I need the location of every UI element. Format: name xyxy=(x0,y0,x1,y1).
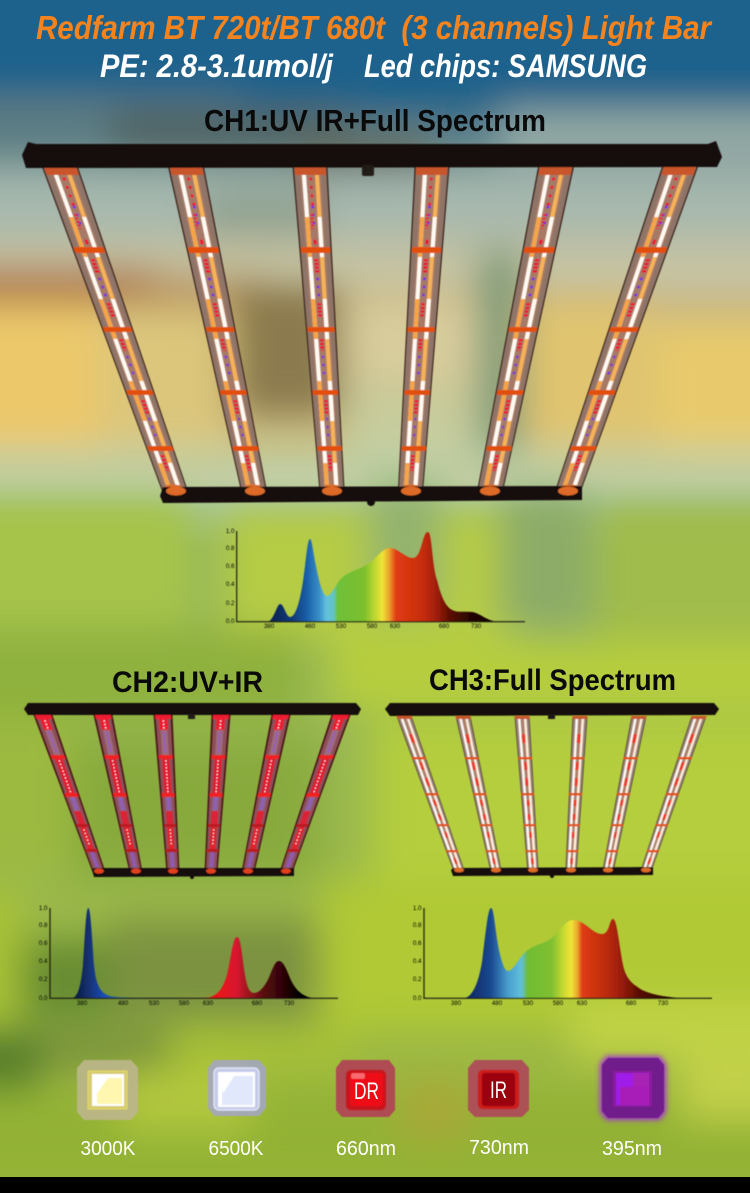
spectrum chart: CH2: 480 xyxy=(118,1000,129,1007)
spectrum chart: CH1: 0.6 xyxy=(226,563,235,570)
heading: CH3: CH3:Full Spectrum xyxy=(429,664,676,697)
CH1 bottom rail xyxy=(160,486,582,506)
icon: 3000K LED chip xyxy=(77,1060,138,1120)
spectrum chart: CH3: 630 xyxy=(577,1000,588,1007)
spectrum chart: CH3: 480 xyxy=(492,1000,503,1007)
CH2 bottom rail xyxy=(92,868,294,879)
icon: 6500K LED chip xyxy=(208,1060,266,1116)
spectrum chart: CH1: 1.0 xyxy=(226,528,235,535)
subtitle: PE and LED chips: Led chips: SAMSUNG xyxy=(364,48,647,84)
label: 730nm: 730nm xyxy=(469,1137,529,1159)
spectrum chart: CH3: 580 xyxy=(553,1000,564,1007)
subtitle: PE and LED chips xyxy=(100,48,647,84)
heading: CH1: CH1:UV IR+Full Spectrum xyxy=(204,103,546,138)
spectrum chart: CH2: 0.6 xyxy=(39,940,48,947)
icon: 730nm IR LED chip xyxy=(468,1060,529,1117)
label: 3000K: 3000K xyxy=(80,1138,136,1160)
spectrum chart: CH1 xyxy=(226,528,525,630)
spectrum chart: CH2: 580 xyxy=(179,1000,190,1007)
spectrum chart: CH1: 0.2 xyxy=(226,600,235,607)
spectrum chart: CH2: 530 xyxy=(149,1000,160,1007)
icon: 395nm UV LED chip xyxy=(600,1056,666,1120)
spectrum chart: CH3: 0.0 xyxy=(413,995,422,1002)
light bar: CH2 xyxy=(24,703,361,879)
spectrum chart: CH2: 0.2 xyxy=(39,976,48,983)
CH1 LED strips xyxy=(42,167,698,496)
spectrum chart: CH2: 380 xyxy=(77,1000,88,1007)
subtitle: PE and LED chips: PE: 2.8-3.1umol/j xyxy=(100,48,334,84)
light bar: CH1 xyxy=(22,141,722,506)
icon: 730nm IR LED chip: IR xyxy=(490,1077,507,1104)
label: 6500K: 6500K xyxy=(208,1138,264,1160)
spectrum chart: CH1: 630 xyxy=(390,623,401,630)
spectrum chart: CH2: 0.8 xyxy=(39,922,48,929)
spectrum chart: CH2: 630 xyxy=(203,1000,214,1007)
spectrum chart: CH3: 0.2 xyxy=(413,976,422,983)
spectrum chart: CH1: 380 xyxy=(264,623,275,630)
CH3 top rail xyxy=(385,703,719,719)
CH2 LED strips xyxy=(34,715,350,874)
spectrum chart: CH1: 530 xyxy=(336,623,347,630)
spectrum chart: CH2: 0.4 xyxy=(39,958,48,965)
icon: 660nm DR LED chip xyxy=(336,1060,395,1117)
spectrum chart: CH3: 0.8 xyxy=(413,922,422,929)
spectrum chart: CH1: 0.0 xyxy=(226,618,235,625)
spectrum chart: CH3: 380 xyxy=(451,1000,462,1007)
spectrum chart: CH3 xyxy=(413,905,712,1007)
label: 660nm: 660nm xyxy=(336,1138,396,1160)
spectrum chart: CH3: 0.6 xyxy=(413,940,422,947)
icon: 660nm DR LED chip: DR xyxy=(354,1078,379,1105)
spectrum chart: CH2: 1.0 xyxy=(39,905,48,912)
spectrum chart: CH1: 730 xyxy=(471,623,482,630)
spectrum chart: CH3: 530 xyxy=(523,1000,534,1007)
CH2 top rail xyxy=(24,703,361,719)
spectrum chart: CH3: 730 xyxy=(658,1000,669,1007)
heading: CH2: CH2:UV+IR xyxy=(112,666,263,699)
label: 395nm: 395nm xyxy=(602,1138,662,1160)
spectrum chart: CH3: 1.0 xyxy=(413,905,422,912)
spectrum chart: CH1: 0.8 xyxy=(226,545,235,552)
spectrum chart: CH2 xyxy=(39,905,338,1007)
footer band xyxy=(0,1177,750,1193)
CH1 top rail xyxy=(22,141,722,176)
spectrum chart: CH2: 680 xyxy=(252,1000,263,1007)
spectrum chart: CH2: 730 xyxy=(284,1000,295,1007)
spectrum chart: CH1: 680 xyxy=(439,623,450,630)
spectrum chart: CH1: 460 xyxy=(305,623,316,630)
CH3 LED strips xyxy=(396,716,706,873)
light bar: CH3 xyxy=(385,703,719,878)
spectrum chart: CH1: 0.4 xyxy=(226,581,235,588)
spectrum chart: CH2: 0.0 xyxy=(39,995,48,1002)
spectrum chart: CH1: 580 xyxy=(367,623,378,630)
spectrum chart: CH3: 0.4 xyxy=(413,958,422,965)
CH3 bottom rail xyxy=(451,867,653,878)
spectrum chart: CH3: 680 xyxy=(626,1000,637,1007)
